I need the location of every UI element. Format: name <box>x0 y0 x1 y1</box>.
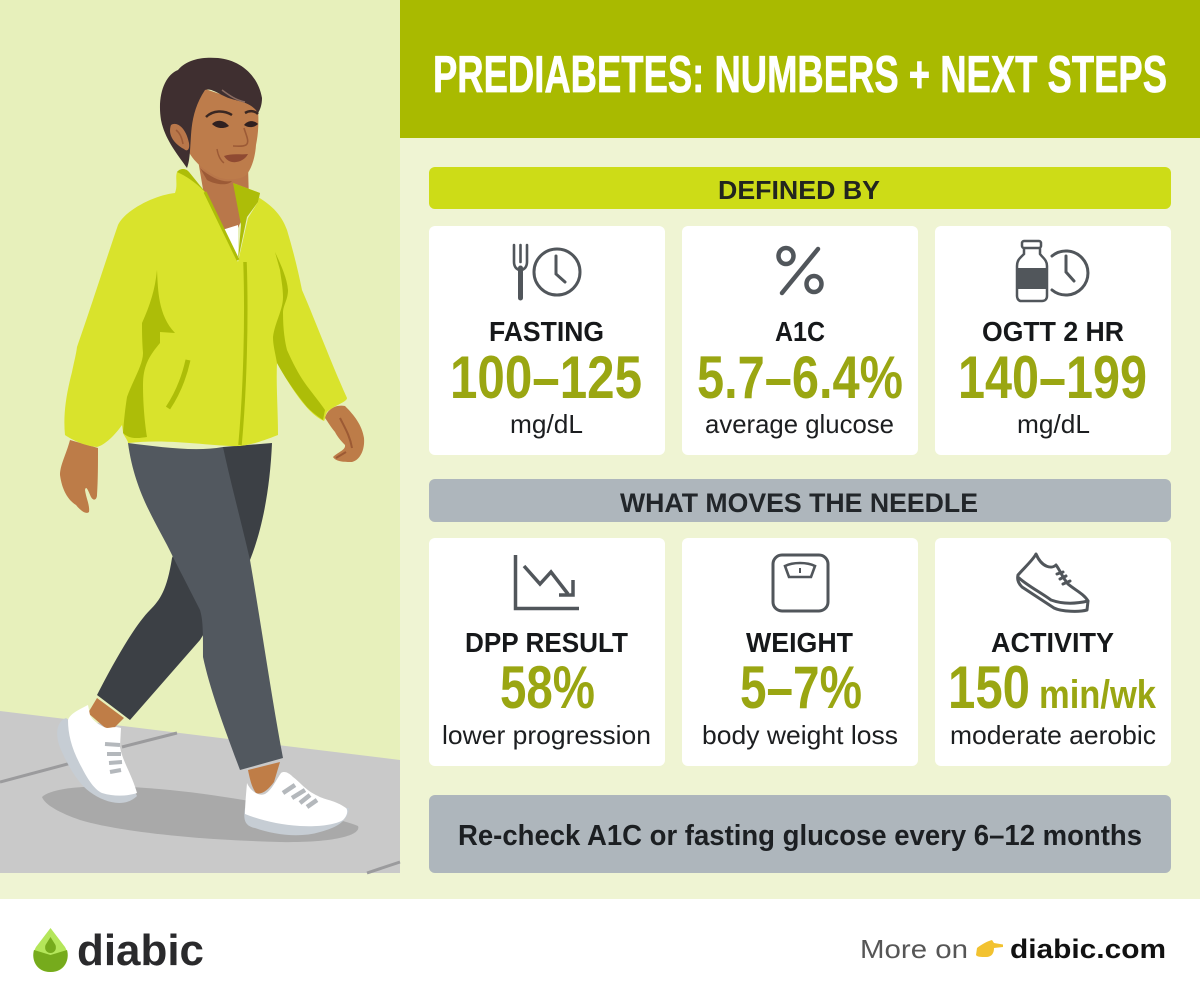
front leg <box>128 443 283 793</box>
neck <box>198 160 249 232</box>
icon: percent <box>778 248 822 293</box>
card: activity <box>935 538 1171 766</box>
face <box>188 88 258 179</box>
back shoe <box>57 705 137 803</box>
jacket <box>64 169 347 447</box>
footer link <box>860 934 1166 964</box>
label: ACTIVITY <box>991 627 1114 658</box>
sidewalk <box>0 711 400 873</box>
callout: re-check reminder <box>429 795 1171 873</box>
white shirt <box>222 225 238 260</box>
card: activity: min/wk <box>1039 673 1157 717</box>
logo: diabic <box>33 926 204 975</box>
label: DPP RESULT <box>465 627 628 658</box>
nose <box>233 128 248 146</box>
front shoe <box>244 772 349 835</box>
label: FASTING <box>489 316 604 347</box>
icon: running shoe <box>1018 554 1088 611</box>
header banner <box>400 0 1200 138</box>
right hand <box>325 406 364 462</box>
jacket shading right <box>273 252 325 420</box>
value: 140–199 <box>958 344 1147 411</box>
hair <box>160 58 262 168</box>
icon: pointing hand <box>976 940 1003 957</box>
left hand <box>60 440 98 513</box>
zip <box>240 262 246 445</box>
label: OGTT 2 HR <box>982 316 1124 347</box>
eyes and brows <box>206 111 258 117</box>
card: A1C <box>682 226 918 455</box>
label: A1C <box>775 316 825 347</box>
jacket shading left <box>123 270 175 438</box>
icon: falling line chart <box>516 555 579 608</box>
unit: average glucose <box>705 409 894 439</box>
card: fasting <box>429 226 665 455</box>
section heading: what moves the needle: WHAT MOVES THE NEEDLE <box>620 488 978 518</box>
icon: fork and clock <box>514 245 580 298</box>
head <box>160 58 262 184</box>
icon: bathroom scale <box>773 555 828 611</box>
unit: mg/dL <box>510 409 583 439</box>
wordmark: diabic <box>77 926 204 975</box>
caption: body weight loss <box>702 720 898 750</box>
value: 5–7% <box>740 654 862 721</box>
section heading: what moves the needle <box>429 479 1171 522</box>
value: 150 <box>948 654 1030 721</box>
ear <box>170 124 189 150</box>
caption: moderate aerobic <box>950 720 1156 750</box>
pocket <box>168 360 188 408</box>
value: 5.7–6.4% <box>697 344 903 411</box>
footer link: More on <box>860 934 968 964</box>
card: weight <box>682 538 918 766</box>
value: 100–125 <box>450 344 642 411</box>
jacket collar interior <box>233 183 260 260</box>
mouth <box>224 154 248 162</box>
icon: bottle and clock <box>1017 241 1088 301</box>
footer link: diabic.com <box>1010 934 1166 964</box>
card: DPP result <box>429 538 665 766</box>
caption: lower progression <box>442 720 651 750</box>
section heading: defined by <box>429 167 1171 209</box>
unit: mg/dL <box>1017 409 1090 439</box>
back leg <box>88 443 272 732</box>
callout: re-check reminder: Re-check A1C or fasting glucose every 6–12 months <box>458 820 1142 852</box>
card: OGTT 2 HR <box>935 226 1171 455</box>
label: WEIGHT <box>746 627 853 658</box>
value: 58% <box>500 654 595 721</box>
illustration: woman walking <box>0 58 400 873</box>
icon: green drop <box>33 928 68 972</box>
section heading: defined by: DEFINED BY <box>718 175 880 205</box>
